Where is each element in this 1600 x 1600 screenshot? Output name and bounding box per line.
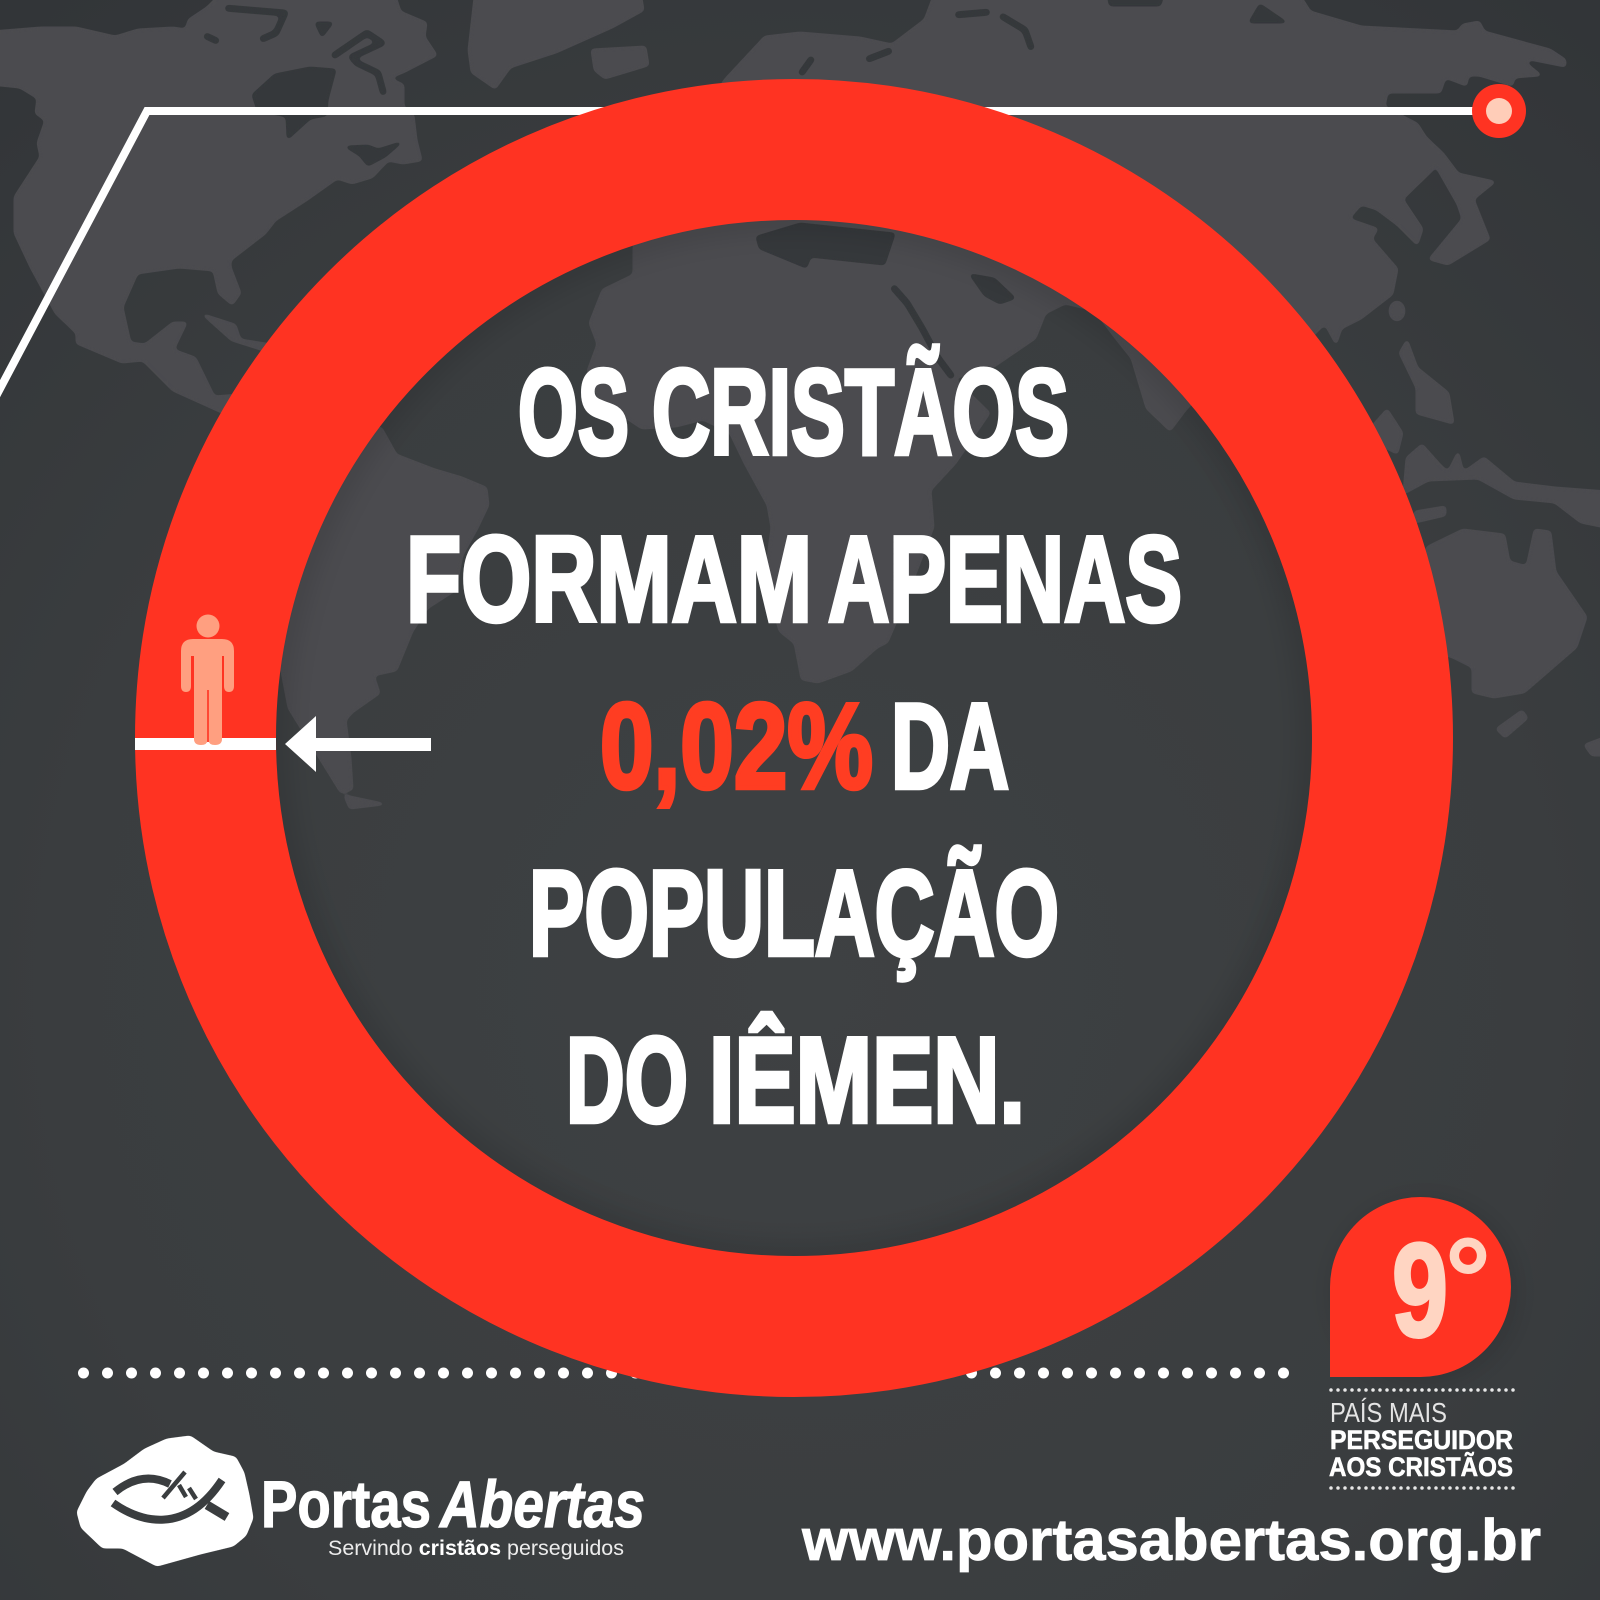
headline line 3: percentage: 0,02%: [600, 678, 873, 814]
map: Hudson Bay: [253, 68, 335, 138]
logo wordmark: Portas: [261, 1467, 431, 1541]
map: Baffin gap: [316, 23, 332, 36]
map: Eurasia and Africa: [588, 0, 1565, 682]
headline line 2: FORMAM: [406, 511, 812, 647]
logo tagline: Servindo cristãos perseguidos: [328, 1536, 624, 1560]
map: Siberian bay: [1250, 5, 1285, 22]
world map: [0, 0, 1600, 808]
map: Tierra del Fuego: [345, 796, 383, 808]
map: Mediterranean: [757, 224, 894, 267]
headline line 3: DA: DA: [891, 678, 1009, 814]
map: North America: [0, 0, 436, 440]
caption line 3: AOS CRISTÃOS: [1329, 1451, 1513, 1482]
map: land masses: [0, 0, 1600, 808]
map: Red Sea: [892, 286, 953, 378]
map: Philippines: [1400, 341, 1453, 423]
caption top dots: [1331, 1388, 1520, 1392]
icon: person: [181, 614, 234, 745]
logo wordmark italic: Abertas: [438, 1467, 645, 1541]
headline line 5: DO: [566, 1012, 688, 1148]
headline line 1: [518, 344, 1069, 480]
map: water channels: [204, 0, 1285, 378]
logo fish: [113, 1472, 227, 1520]
map: Indonesia: [1404, 445, 1600, 530]
map: Java: [1415, 507, 1445, 522]
dotted divider: [84, 1368, 1284, 1378]
logo stone: [78, 1437, 252, 1565]
map: Persian Gulf: [971, 275, 1014, 303]
map: Cuba: [204, 315, 272, 352]
arrow: [285, 716, 431, 772]
rank badge shadow: [1335, 1202, 1515, 1382]
map: Borneo: [1371, 410, 1402, 453]
headline line 1: OS: [518, 344, 629, 480]
map: South America: [240, 428, 488, 792]
headline line 5: IÊMEN.: [709, 1012, 1025, 1148]
degree sign: °: [1444, 1215, 1492, 1349]
red ring: [206, 150, 1382, 1326]
caption line 1: PAÍS MAIS: [1330, 1397, 1447, 1428]
rank badge: [1330, 1197, 1511, 1377]
website URL: www.portasabertas.org.br: [801, 1508, 1541, 1573]
map: Great Lakes: [347, 143, 400, 165]
map: Taiwan: [1390, 302, 1404, 320]
map: Kamchatka peninsula: [1425, 137, 1494, 264]
rank number: 9: [1392, 1217, 1448, 1365]
headline line 5: [566, 1012, 1025, 1148]
connector line: [0, 111, 1480, 400]
caption bottom dots: [1331, 1486, 1520, 1490]
map: Greenland: [469, 0, 643, 88]
map: Australia: [1400, 530, 1586, 697]
headline line 2: APENAS: [828, 511, 1182, 647]
map: Arctic channels: [204, 8, 384, 95]
headline line 4: POPULAÇÃO: [529, 845, 1059, 981]
map: southern islands: [1497, 711, 1600, 755]
map: Iceland: [592, 47, 648, 78]
rank caption: [1329, 1390, 1520, 1488]
ring inner shadow: [272, 216, 1316, 1260]
headline line 1: CRISTÃOS: [652, 344, 1069, 480]
map: Arctic inlet: [1106, 0, 1167, 5]
map: northern seas: [800, 12, 1032, 75]
location marker: [1472, 84, 1526, 138]
headline: [406, 344, 1182, 1148]
caption line 2: PERSEGUIDOR: [1330, 1425, 1513, 1455]
logo: [78, 1437, 645, 1565]
white marker bar: [135, 738, 276, 750]
